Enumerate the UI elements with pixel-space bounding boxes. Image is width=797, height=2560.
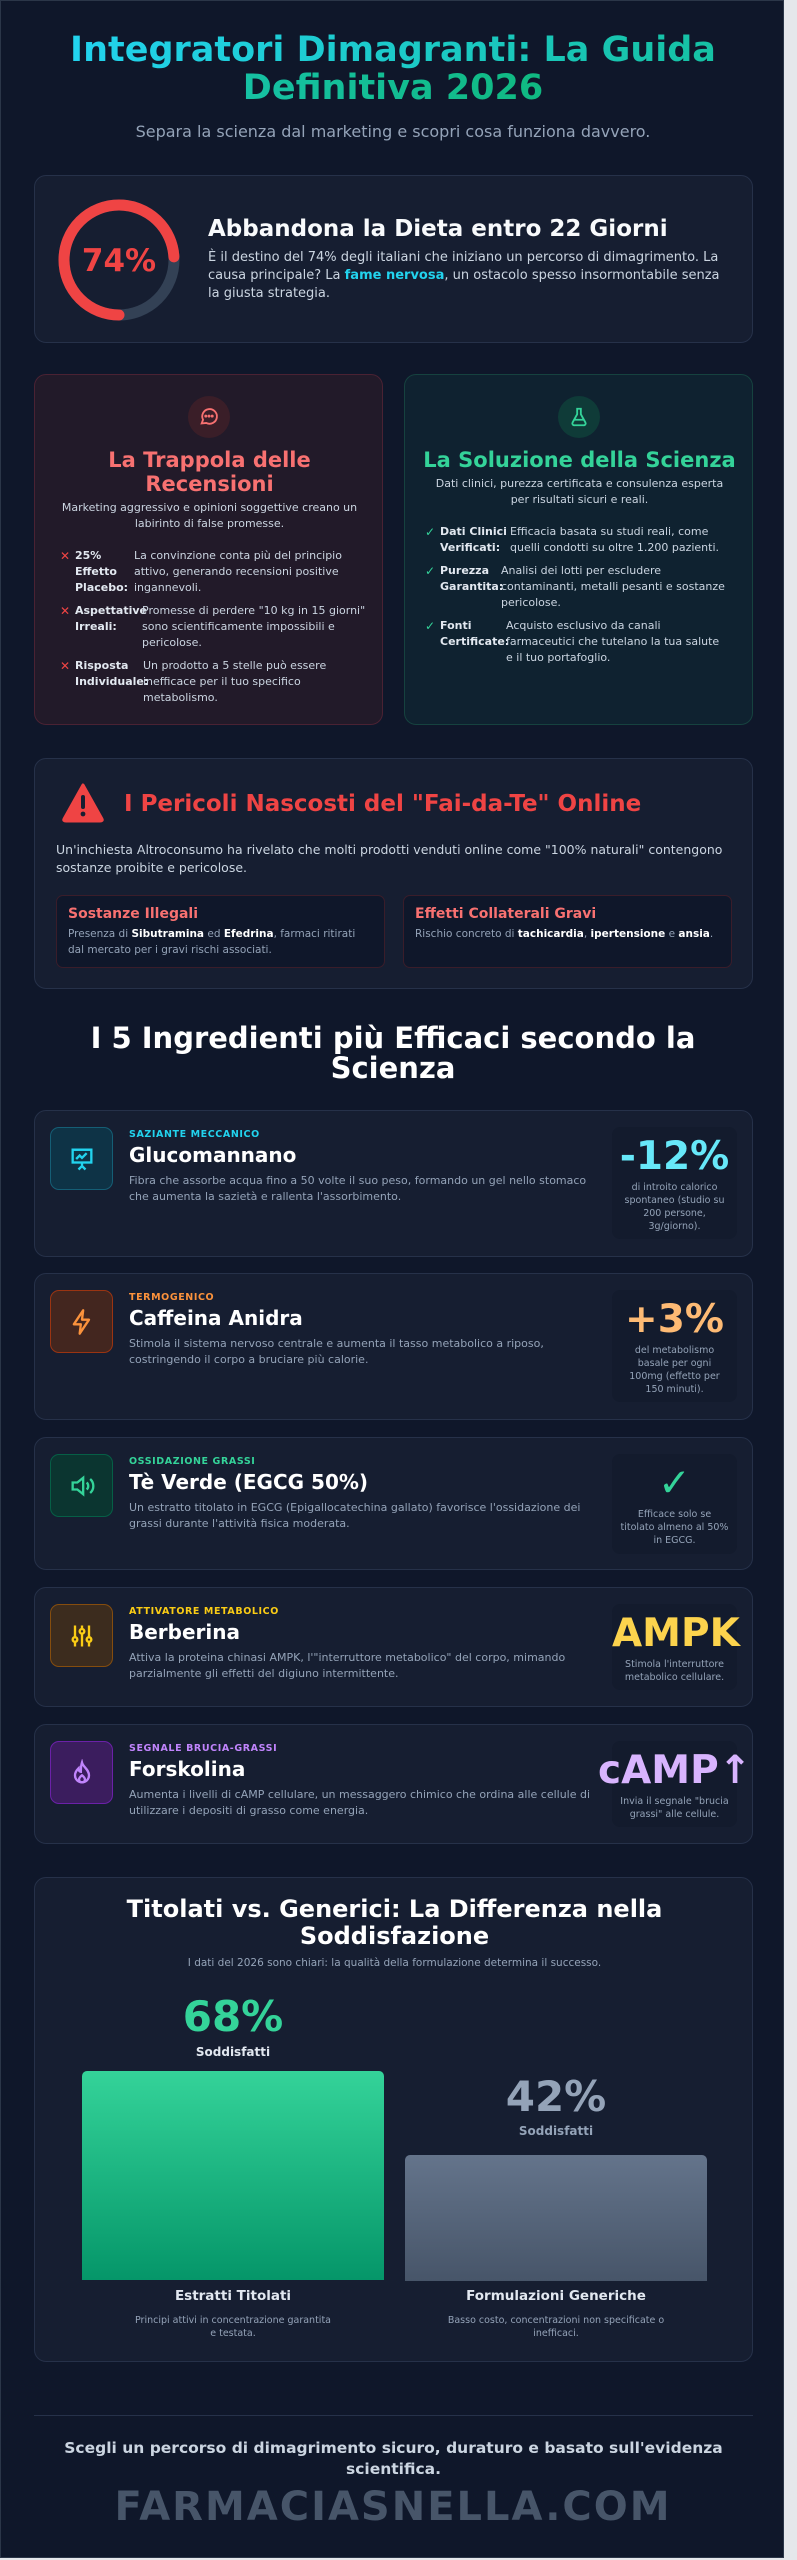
card: te verde: Tè Verde (EGCG 50%) (129, 1470, 368, 1494)
bar: estratti titolati: Soddisfatti (196, 2045, 270, 2059)
icon: bolt (50, 1290, 113, 1353)
heading (108, 448, 311, 496)
card: berberina: Berberina (129, 1620, 240, 1644)
heading: 5 ingredienti: I 5 Ingredienti più Efficaci secondo la (91, 1021, 695, 1055)
label: formulazioni generiche: Basso costo, concentrazioni non specificate o inefficaci. (448, 2315, 664, 2339)
card: glucomannano: SAZIANTE MECCANICO (129, 1129, 260, 1140)
box: sostanze illegali: Presenza di Sibutramina ed Efedrina, farmaci ritirati dal mercato per i gravi rischi associati. (68, 928, 355, 956)
card: caffeina: TERMOGENICO (129, 1292, 214, 1303)
stat: -12% (612, 1127, 737, 1239)
chart heading: Soddisfazione (300, 1922, 489, 1950)
bar: formulazioni generiche (405, 2072, 707, 2281)
title (70, 30, 716, 108)
card: glucomannano: Fibra che assorbe acqua fino a 50 volte il suo peso, formando un gel nello stomaco che aumenta la sazietà e rallenta l'assorbimento. (129, 1174, 586, 1203)
chart subtitle: I dati del 2026 sono chiari: la qualità della formulazione determina il successo. (188, 1957, 601, 1969)
heading: 5 ingredienti: Scienza (331, 1051, 455, 1085)
heading: La Trappola delle (108, 448, 311, 472)
heading: 5 ingredienti (91, 1021, 695, 1085)
description: Marketing aggressivo e opinioni soggettive creano un labirinto di false promesse. (62, 501, 357, 530)
card: forskolina (34, 1724, 753, 1844)
stat headline: Abbandona la Dieta entro 22 Giorni (208, 216, 668, 242)
list of solutions: ✓ (425, 525, 435, 539)
stat: AMPK: Stimola l'interruttore metabolico cellulare. (625, 1659, 724, 1683)
list of solutions: Purezza Garantita: (440, 564, 503, 593)
list of problems: Risposta Individuale: (75, 659, 148, 688)
list of solutions: Analisi dei lotti per escludere contaminanti, metalli pesanti e sostanze pericolose. (501, 564, 725, 609)
box: sostanze illegali: Sostanze Illegali (68, 906, 198, 922)
card: te verde: Un estratto titolato in EGCG (Epigallocatechina gallato) favorisce l'ossidazione dei grassi durante l'attività fisica moderata. (129, 1501, 580, 1530)
icon: sliders (50, 1604, 113, 1667)
stat: AMPK (612, 1604, 737, 1690)
ring chart 74%: 74% (82, 243, 156, 279)
label: formulazioni generiche (448, 2288, 664, 2339)
bar: formulazioni generiche: Soddisfatti (519, 2124, 593, 2138)
list of solutions: Efficacia basata su studi reali, come quelli condotti su oltre 1.200 pazienti. (510, 525, 719, 554)
card: caffeina (34, 1273, 753, 1420)
stat: cAMP (612, 1741, 737, 1827)
card: glucomannano (34, 1110, 753, 1257)
list of problems: ✕ (60, 604, 70, 618)
list of problems (60, 549, 365, 704)
list of solutions (425, 525, 725, 664)
bar: estratti titolati: 68% (183, 1992, 283, 2041)
list of problems: Un prodotto a 5 stelle può essere inefficace per il tuo specifico metabolismo. (143, 659, 326, 704)
panel: 74% stat (34, 175, 753, 343)
stat: -12%: di introito calorico spontaneo (studio su 200 persone, 3g/giorno). (625, 1182, 724, 1232)
card: forskolina: Forskolina (129, 1757, 245, 1781)
chart heading (126, 1895, 662, 1950)
list of problems: Promesse di perdere "10 kg in 15 giorni" sono scientificamente impossibili e pericolose. (142, 604, 365, 649)
box: effetti collaterali (403, 895, 732, 968)
label: formulazioni generiche: Formulazioni Generiche (466, 2288, 646, 2304)
stat: check: Efficace solo se titolato almeno al 50% in EGCG. (621, 1509, 728, 1546)
card: forskolina: Aumenta i livelli di cAMP cellulare, un messaggero chimico che ordina alle cellule di utilizzare i depositi di grasso come energia. (129, 1788, 590, 1817)
card: glucomannano: Glucomannano (129, 1143, 296, 1167)
stat: check: ✓ (658, 1461, 691, 1506)
card: caffeina: Caffeina Anidra (129, 1306, 303, 1330)
brand footer: FARMACIASNELLA.COM (114, 2484, 672, 2530)
chart heading: Titolati vs. Generici: La Differenza nella (127, 1895, 662, 1923)
card: caffeina: Stimola il sistema nervoso centrale e aumenta il tasso metabolico a riposo, costringendo il corpo a bruciare più calorie. (129, 1337, 544, 1366)
list of problems: Aspettative Irreali: (75, 604, 147, 633)
list of problems: ✕ (60, 659, 70, 673)
list of solutions: Acquisto esclusivo da canali farmaceutici che tutelano la tua salute e il tuo portafoglio. (506, 619, 719, 664)
list of problems: 25% Effetto Placebo: (75, 549, 128, 594)
heading: Recensioni (145, 472, 274, 496)
box: effetti collaterali: Rischio concreto di tachicardia, ipertensione e ansia. (415, 928, 713, 940)
list of solutions: ✓ (425, 619, 435, 633)
card: te verde (34, 1437, 753, 1570)
box: effetti collaterali: Effetti Collaterali Gravi (415, 906, 596, 922)
footer message: Scegli un percorso di dimagrimento sicuro, duraturo e basato sull'evidenza scientifica. (64, 2439, 723, 2478)
label: estratti titolati: Principi attivi in concentrazione garantita e testata. (135, 2315, 331, 2339)
stat: cAMP: cAMP↑ (598, 1748, 751, 1793)
heading: La Soluzione della Scienza (423, 448, 736, 472)
list of problems: La convinzione conta più del principio attivo, generando recensioni positive ingannevoli. (134, 549, 342, 594)
icon: chart board (50, 1127, 113, 1190)
icon: flask (558, 396, 600, 438)
stat: +3% (612, 1290, 737, 1402)
stat: +3%: +3% (625, 1297, 724, 1342)
stat: cAMP: Invia il segnale "brucia grassi" alle cellule. (620, 1796, 729, 1820)
ring chart 74% (58, 200, 180, 320)
heading: I Pericoli Nascosti del "Fai-da-Te" Online (124, 791, 641, 817)
label: estratti titolati (135, 2288, 331, 2339)
panel: trappola recensioni (34, 374, 383, 725)
icon: flame (50, 1741, 113, 1804)
label: estratti titolati: Estratti Titolati (175, 2288, 291, 2304)
subtitle: Separa la scienza dal marketing e scopri cosa funziona davvero. (136, 122, 650, 141)
panel: titolati vs generici chart (34, 1877, 753, 2362)
stat: check (612, 1454, 737, 1554)
description: Dati clinici, purezza certificata e consulenza esperta per risultati sicuri e reali. (436, 477, 723, 506)
icon: warning (62, 783, 104, 822)
list of solutions: Dati Clinici Verificati: (440, 525, 507, 554)
stat: AMPK: AMPK (612, 1611, 740, 1656)
stat: +3%: del metabolismo basale per ogni 100mg (effetto per 150 minuti). (629, 1345, 720, 1395)
stat: -12%: -12% (620, 1134, 729, 1179)
card: berberina: ATTIVATORE METABOLICO (129, 1606, 279, 1617)
list of solutions: Fonti Certificate: (440, 619, 509, 648)
panel: pericoli fai-da-te (34, 758, 753, 989)
card: te verde: OSSIDAZIONE GRASSI (129, 1456, 255, 1467)
box: sostanze illegali (56, 895, 385, 968)
title: Integratori Dimagranti: La Guida (70, 30, 716, 70)
icon: sound waves (50, 1454, 113, 1517)
description: Un'inchiesta Altroconsumo ha rivelato che molti prodotti venduti online come "100% naturali" contengono sostanze proibite e pericolose. (56, 842, 722, 875)
list of problems: ✕ (60, 549, 70, 563)
title: Definitiva 2026 (243, 68, 543, 108)
card: berberina: Attiva la proteina chinasi AMPK, l'"interruttore metabolico" del corpo, mimando parzialmente gli effetti del digiuno intermittente. (129, 1651, 565, 1680)
bar: formulazioni generiche: 42% (506, 2072, 606, 2121)
bar: estratti titolati (82, 1992, 384, 2280)
icon: chat bubble (188, 396, 230, 438)
panel: soluzione scienza (404, 374, 753, 725)
list of solutions: ✓ (425, 564, 435, 578)
card: forskolina: SEGNALE BRUCIA-GRASSI (129, 1743, 277, 1754)
card: berberina (34, 1587, 753, 1707)
stat text: È il destino del 74% degli italiani che iniziano un percorso di dimagrimento. La causa principale? La fame nervosa, un ostacolo spesso insormontabile senza la giusta strategia. (208, 250, 720, 301)
